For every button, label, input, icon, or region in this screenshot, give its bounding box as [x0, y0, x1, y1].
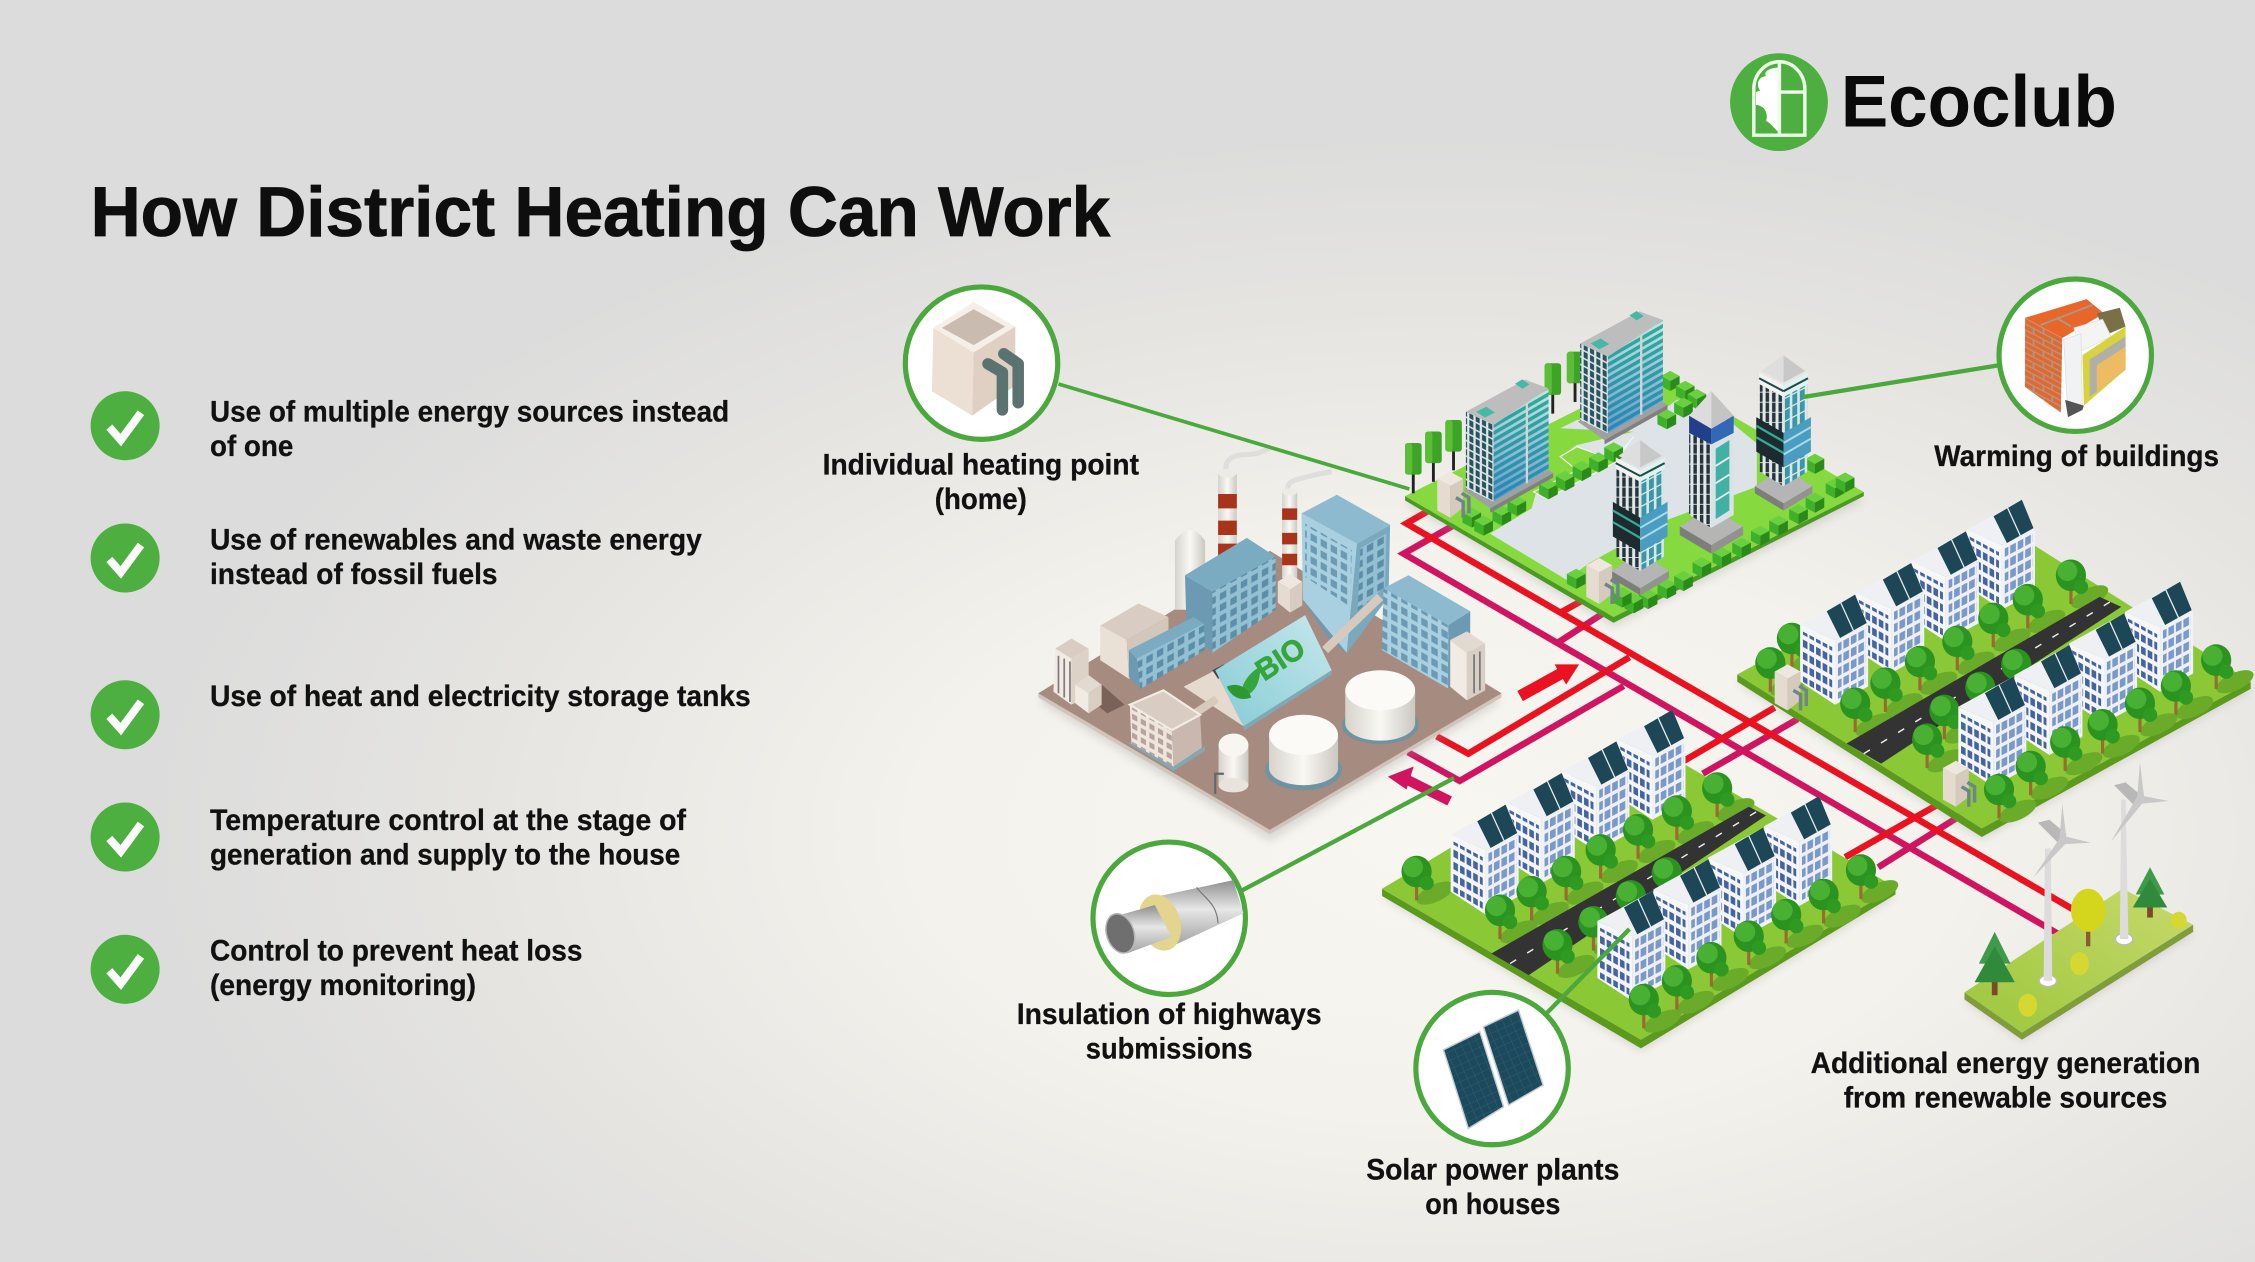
small unit behind tall building: [1278, 574, 1302, 613]
panel: high-rise block: [1405, 311, 1864, 627]
item: heat loss control: Control to prevent heat loss: [210, 935, 582, 968]
turbine front: [2034, 804, 2091, 987]
callout: solar power plants: [1366, 929, 1629, 1221]
trees behind front row: [1542, 857, 1707, 983]
arrow: return direction: [1388, 767, 1450, 801]
leader line: [1240, 778, 1454, 892]
callout: warming of buildings: [1803, 279, 2219, 473]
label: Insulation of highways: [1017, 998, 1322, 1031]
label: [1366, 1153, 1619, 1221]
substation units: [1775, 664, 1975, 807]
heating pipes network: [1404, 508, 2072, 936]
leader line: [1546, 929, 1629, 1014]
item: multiple energy sources: [91, 391, 729, 463]
beige office: [1126, 690, 1205, 771]
logo: Ecoclub: [1730, 53, 2117, 151]
block base: [1964, 889, 2193, 1041]
item: heat loss control: [91, 935, 582, 1004]
label: on houses: [1425, 1188, 1560, 1221]
item: renewables and waste energy: Use of renewables and waste energy: [210, 523, 702, 556]
unit right of plant: [1450, 631, 1485, 700]
logo icon: window in green circle: [1730, 53, 1828, 151]
back row buildings: [1755, 500, 2035, 705]
panel: wind energy block: [1964, 762, 2193, 1041]
column trees: [1405, 352, 1583, 493]
leader line: [1803, 365, 1999, 397]
item: multiple energy sources: of one: [210, 430, 293, 463]
panel: residential block right: [1737, 500, 2255, 840]
item: storage tanks: [91, 680, 751, 749]
pine trees: [1975, 867, 2167, 995]
label: (home): [935, 483, 1027, 516]
title: How District Heating Can Work: [91, 172, 1111, 251]
label: additional energy generation: Additional energy generation: [1811, 1047, 2200, 1080]
circle icon: insulated pipe: [1093, 842, 1245, 994]
yellow bushes: [2018, 912, 2187, 1017]
label: [823, 449, 1139, 516]
label: additional energy generation: [1811, 1047, 2200, 1114]
item: temperature control: [91, 802, 686, 872]
road: [1491, 807, 1766, 975]
label: submissions: [1086, 1032, 1253, 1065]
arrow: supply direction: [1520, 664, 1579, 696]
front row buildings: [1597, 796, 1832, 1001]
leader line: [1058, 384, 1409, 489]
road: [1847, 597, 2121, 764]
plant ground: [1038, 551, 1501, 841]
label: additional energy generation: from renewable sources: [1844, 1081, 2167, 1114]
right blue building: [1382, 575, 1470, 688]
storage tank large back: [1342, 670, 1419, 744]
item: heat loss control: (energy monitoring): [210, 969, 476, 1002]
units left of plant: [1053, 639, 1125, 713]
office buildings: [1463, 311, 1668, 513]
label: Individual heating point: [823, 449, 1139, 482]
item: renewables and waste energy: instead of fossil fuels: [210, 558, 498, 591]
back row trees: [1485, 772, 1758, 948]
item: multiple energy sources: Use of multiple energy sources instead: [210, 395, 729, 428]
hedges: [1462, 371, 1854, 613]
blue building A: [1185, 538, 1276, 653]
circle icon: heating unit: [905, 287, 1058, 439]
trees behind front row: [1912, 649, 2057, 777]
logo wordmark: Ecoclub: [1841, 61, 2117, 143]
biomass prism BIO: [1184, 615, 1332, 731]
panel: checklist: [91, 391, 751, 1004]
substation units: [1437, 472, 1618, 604]
small tank: [1215, 733, 1248, 794]
beige hall: [1100, 603, 1168, 679]
silo: [1175, 530, 1205, 610]
plaza: [1490, 397, 1757, 580]
circle icon: solar panels: [1416, 992, 1568, 1145]
pink return pipes: [1404, 523, 2062, 936]
item: renewables and waste energy: [91, 523, 702, 593]
back row trees: [1840, 559, 2112, 741]
turbine rear: [2111, 762, 2169, 945]
item: storage tanks: Use of heat and electricity storage tanks: [210, 680, 751, 713]
back row buildings: [1401, 710, 1685, 915]
chimney smoke: [1226, 447, 1332, 490]
low blue hall: [1129, 617, 1205, 689]
item: temperature control: generation and supply to the house: [210, 838, 680, 871]
label: [1017, 998, 1322, 1065]
label: Solar power plants: [1366, 1153, 1619, 1186]
panel: biomass heating plant: [1038, 447, 1501, 841]
chimneys: [1218, 469, 1297, 578]
callout: insulation of highways: [1017, 778, 1454, 1065]
tall blue building: [1302, 495, 1390, 653]
storage tank large front: [1265, 715, 1342, 790]
callout: individual heating point: [823, 287, 1409, 516]
block base: [1737, 528, 2251, 840]
yellow tree: [2071, 889, 2105, 946]
towers: [1611, 355, 1812, 595]
front row buildings: [1958, 582, 2193, 787]
circle icon: wall insulation: [1999, 279, 2151, 431]
front row trees: [1629, 854, 1902, 1037]
block base: [1405, 371, 1864, 627]
block base: [1382, 736, 1895, 1051]
green inner strip: [1533, 437, 1634, 498]
item: temperature control: Temperature control at the stage of: [210, 804, 686, 837]
front row trees: [1984, 644, 2255, 827]
red supply pipes: [1406, 508, 2072, 909]
panel: residential block lower: [1382, 710, 1902, 1051]
label: Warming of buildings: [1934, 440, 2219, 473]
biomass prism BIO: BIO: [1250, 632, 1311, 688]
conveyor: [1325, 597, 1380, 650]
